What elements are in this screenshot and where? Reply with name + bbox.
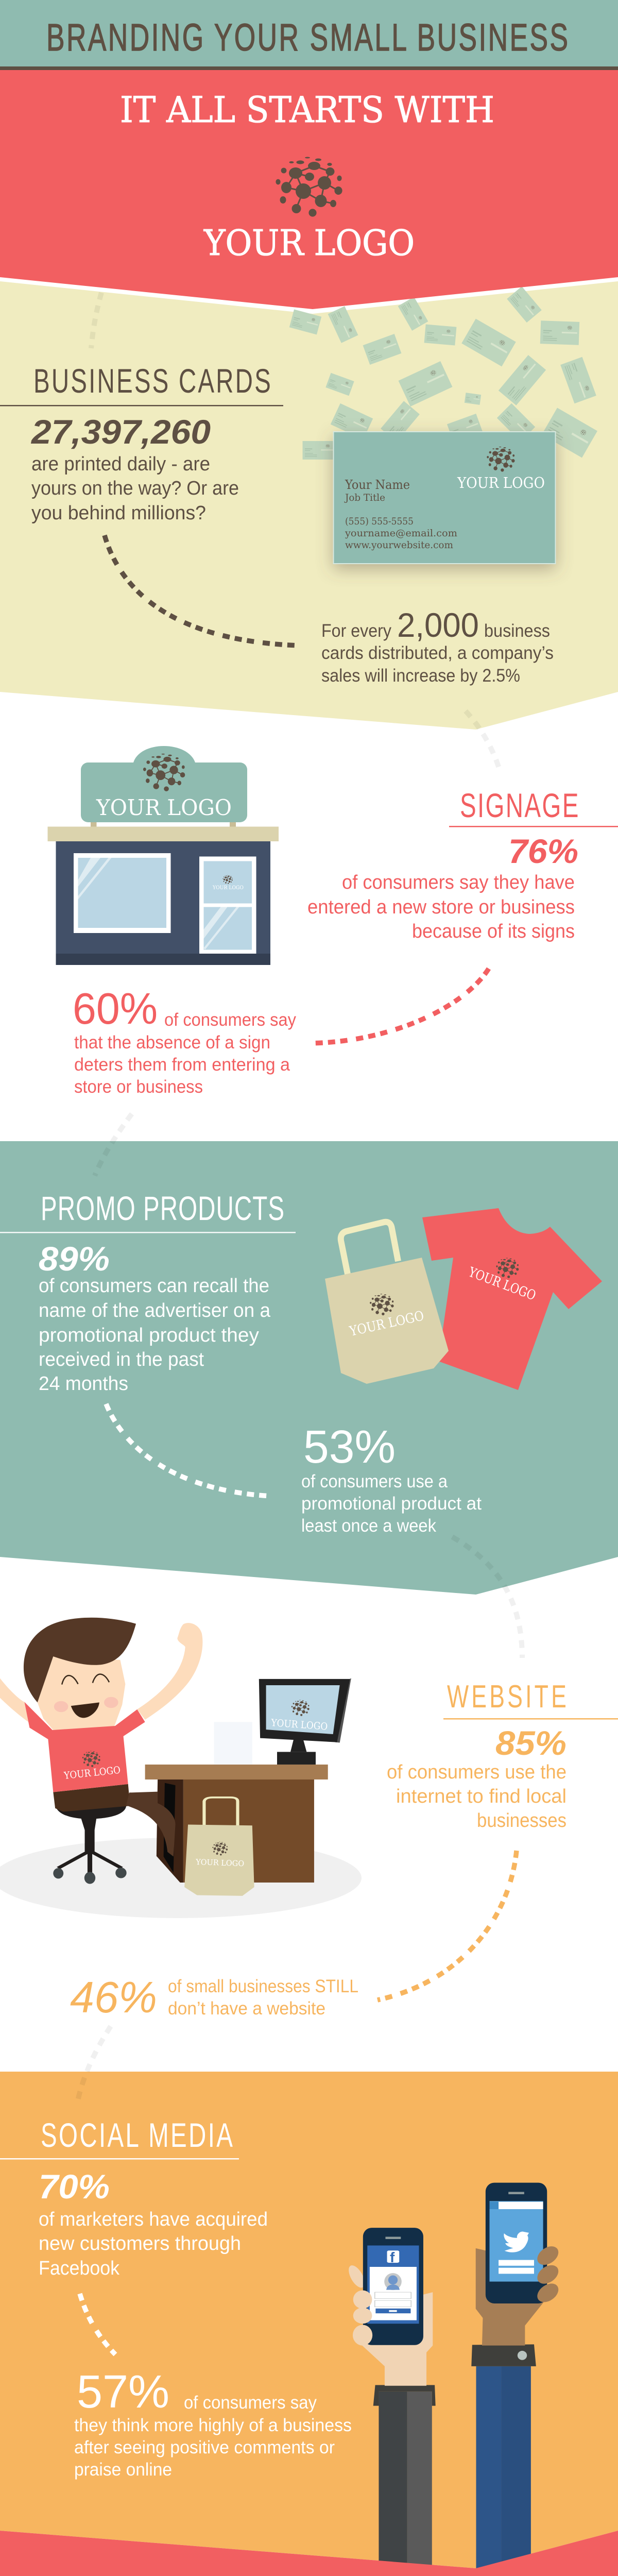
stat: 70%: 70% xyxy=(39,2167,110,2206)
text: 57% description: praise online xyxy=(74,2460,172,2480)
illustration: storefront: YOUR LOGO xyxy=(96,795,232,820)
text: 76% description xyxy=(307,872,575,942)
panel: website xyxy=(0,1537,618,2022)
text: 76% description: of consumers say they have xyxy=(342,872,575,893)
text: 85% description: businesses xyxy=(477,1810,566,1832)
illustration: person at desk: YOUR LOGO xyxy=(270,1717,328,1733)
text: 53% description: least once a week xyxy=(301,1516,436,1536)
heading: business cards: BUSINESS CARDS xyxy=(33,362,271,400)
stat: 46%: 46% xyxy=(70,1973,157,2022)
text: 85% description: of consumers use the xyxy=(387,1761,566,1783)
icon: facebook f: f xyxy=(390,2249,395,2265)
text: 60% description: deters them from entering a xyxy=(74,1055,290,1075)
business card: Job Title xyxy=(344,492,385,503)
faint connector dashes xyxy=(91,293,101,348)
panel: promo products xyxy=(0,1114,618,1595)
text: for every 2,000 xyxy=(321,606,554,686)
text: 57% description: of consumers say xyxy=(184,2393,317,2413)
text: for every 2,000: For every xyxy=(321,621,391,641)
text: printed daily: are printed daily - are xyxy=(31,453,210,475)
text: 60% description: of consumers say xyxy=(164,1010,296,1030)
text: 53% description: promotional product at xyxy=(301,1494,482,1514)
illustration: t-shirt: YOUR LOGO xyxy=(466,1264,538,1304)
text: 57% description: after seeing positive comments or xyxy=(74,2437,335,2458)
text: 46% description xyxy=(168,1976,358,2019)
text: 60% description xyxy=(74,1010,296,1097)
text: your logo: YOUR LOGO xyxy=(203,223,415,264)
text: printed daily: you behind millions? xyxy=(31,502,206,524)
illustration: tote bag xyxy=(325,1222,449,1384)
heading: signage: SIGNAGE xyxy=(460,787,578,825)
stat: 57%: 57% xyxy=(77,2366,169,2418)
business card: (555) 555-5555 xyxy=(345,516,414,527)
text: 46% description: of small businesses STILL xyxy=(168,1976,358,1996)
illustration: tote bag: YOUR LOGO xyxy=(348,1308,425,1340)
heading: promo products: PROMO PRODUCTS xyxy=(41,1190,284,1228)
icon: main logo xyxy=(276,157,342,217)
text: 89% description xyxy=(39,1275,271,1395)
illustration: storefront: YOUR LOGO xyxy=(212,885,244,891)
text: 53% description xyxy=(301,1471,482,1536)
business card: yourname@email.com xyxy=(345,528,457,539)
icon: card logo xyxy=(487,447,515,472)
panel: signage xyxy=(47,711,618,1097)
text: 70% description xyxy=(39,2209,268,2279)
text: 89% description: name of the advertiser on a xyxy=(39,1300,271,1321)
text: 85% description: internet to find local xyxy=(396,1786,566,1807)
text: 89% description: received in the past xyxy=(39,1349,204,1370)
text: 85% description xyxy=(387,1761,566,1832)
stat: 89%: 89% xyxy=(39,1240,110,1278)
text: for every 2,000: sales will increase by 2.5% xyxy=(321,666,520,686)
arrow: red dashed connector xyxy=(310,969,489,1043)
text: 89% description: promotional product they xyxy=(39,1325,259,1346)
text: for every 2,000: 2,000 xyxy=(397,606,479,644)
arrow: dashed connector xyxy=(105,535,300,646)
illustration: person at desk xyxy=(0,1618,362,1918)
panel: sources xyxy=(0,2531,618,2576)
text: 53% description: of consumers use a xyxy=(301,1471,448,1492)
text: printed daily: yours on the way? Or are xyxy=(31,478,239,499)
text: 89% description: of consumers can recall the xyxy=(39,1275,269,1297)
arrow: orange dashed connector xyxy=(377,1851,517,2000)
business card: Your Name xyxy=(345,478,410,492)
panel: social media xyxy=(0,2026,618,2576)
stat: 85%: 85% xyxy=(495,1724,566,1762)
text: 46% description: don’t have a website xyxy=(168,1998,325,2019)
text: for every 2,000: cards distributed, a company’s xyxy=(321,643,554,663)
illustration: person at desk: YOUR LOGO xyxy=(195,1857,244,1868)
text: 60% description: store or business xyxy=(74,1077,203,1097)
arrow: white dashed connector xyxy=(80,2294,115,2354)
stat: 27,397,260: 27,397,260 xyxy=(30,413,211,451)
illustration: person at desk: YOUR LOGO xyxy=(63,1765,121,1782)
text: 57% description xyxy=(74,2393,352,2480)
falling business cards xyxy=(289,286,597,460)
heading: website: WEBSITE xyxy=(447,1679,566,1715)
illustration: t-shirt xyxy=(422,1208,602,1390)
illustration: hands holding phones xyxy=(346,2183,562,2576)
business card xyxy=(334,432,555,564)
text: printed daily xyxy=(31,453,239,524)
header: title and logo banner xyxy=(0,0,618,309)
text: for every 2,000: business xyxy=(484,621,550,641)
illustration: storefront xyxy=(47,746,279,965)
text: 60% description: that the absence of a sign xyxy=(74,1032,270,1053)
panel: business cards xyxy=(0,281,618,730)
business card: www.yourwebsite.com xyxy=(345,539,453,551)
text: 70% description: of marketers have acquired xyxy=(39,2209,268,2230)
text: 70% description: new customers through xyxy=(39,2233,241,2255)
text: 70% description: Facebook xyxy=(39,2258,120,2279)
stat: 53%: 53% xyxy=(303,1421,396,1473)
business card: YOUR LOGO xyxy=(457,474,545,492)
arrow: white dashed connector xyxy=(106,1404,273,1496)
text: 76% description: because of its signs xyxy=(412,921,575,942)
text: 57% description: they think more highly of a business xyxy=(74,2415,352,2435)
text: 89% description: 24 months xyxy=(39,1373,128,1395)
text: 76% description: entered a new store or business xyxy=(307,896,575,918)
title: BRANDING YOUR SMALL BUSINESS xyxy=(46,16,568,59)
stat: 76%: 76% xyxy=(508,832,578,870)
heading: it all starts with: IT ALL STARTS WITH xyxy=(120,90,494,131)
heading: social media: SOCIAL MEDIA xyxy=(41,2116,233,2155)
stat: 60%: 60% xyxy=(73,985,158,1033)
